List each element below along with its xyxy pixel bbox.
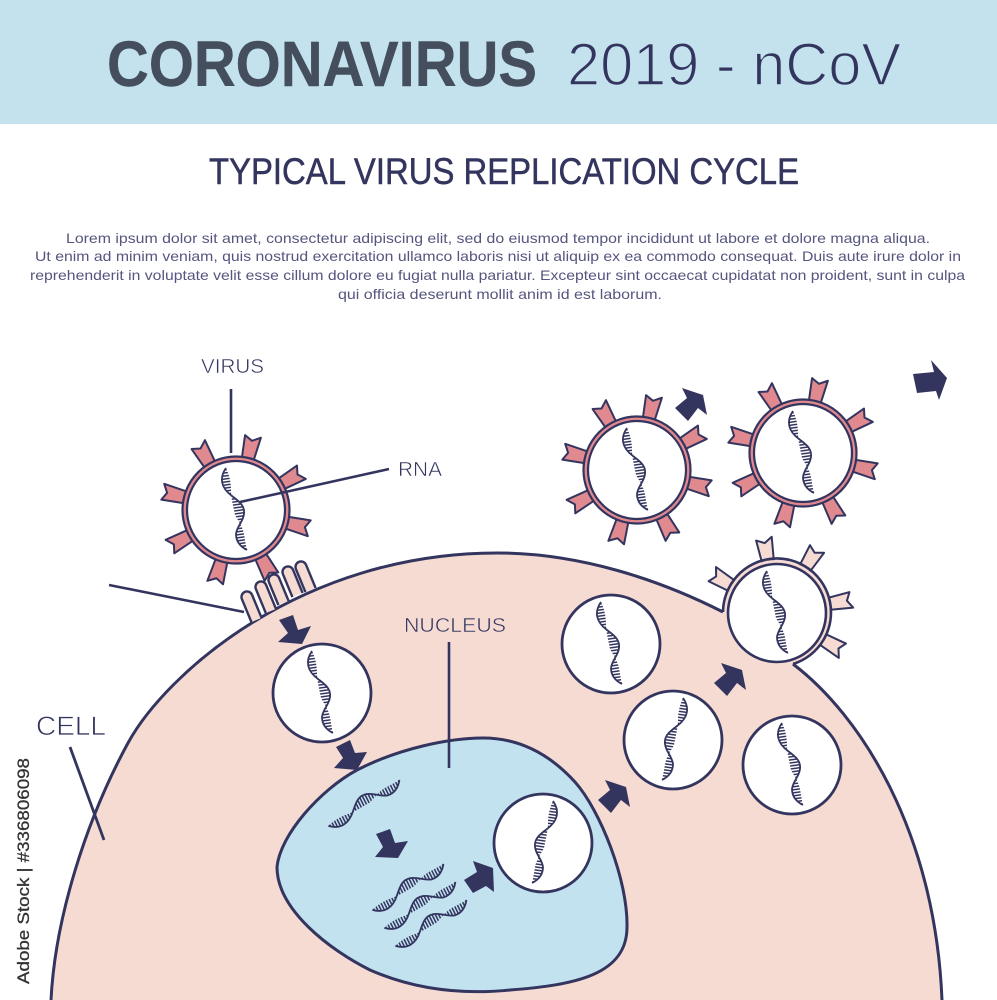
RNA strand in nucleus: [322, 780, 407, 830]
label: VIRUS: [201, 356, 264, 453]
header band: [0, 0, 997, 124]
label: VIRUS: VIRUS: [201, 356, 264, 378]
cell body: [51, 553, 942, 1000]
label: RNA: [240, 459, 443, 502]
vesicle entering cell: [273, 644, 371, 742]
virus attached to the cell: [160, 434, 312, 585]
vesicle right: [743, 716, 841, 814]
label: CELL: [36, 711, 106, 840]
arrow: assembly: [464, 861, 494, 893]
arrow: outward: [913, 360, 947, 400]
label: NUCLEUS: NUCLEUS: [404, 615, 506, 637]
vesicle middle: [624, 691, 722, 789]
body text: Ut enim ad minim veniam, quis nostrud exercitation ullamco laboris nisi ut aliquip ex ea commodo consequat. Duis aute irure dolor in: [35, 248, 961, 264]
subtitle: 2019 - nCoV: 2019 - nCoV: [567, 31, 901, 98]
side caption: Adobe Stock | #336806098: [14, 758, 33, 984]
heading: TYPICAL VIRUS REPLICATION CYCLE: [209, 151, 799, 192]
released virus left: [561, 394, 713, 545]
vesicle in nucleus: [494, 794, 592, 892]
arrow: to nucleus: [334, 740, 367, 770]
arrow: to membrane: [714, 663, 746, 696]
arrow: into cell: [278, 615, 311, 644]
vesicle upper: [562, 595, 660, 693]
cell receptors: [241, 561, 316, 622]
nucleus: [277, 738, 627, 992]
body text: Lorem ipsum dolor sit amet, consectetur adipiscing elit, sed do eiusmod tempor incididunt ut labore et dolore magna aliqua.: [66, 230, 930, 246]
replicated RNA strands: [366, 864, 474, 950]
title: CORONAVIRUS: [107, 28, 537, 100]
body text: [30, 230, 965, 302]
released virus right: [727, 377, 879, 528]
arrow: leaving nucleus: [598, 780, 630, 813]
arrow: release: [675, 388, 707, 421]
budding virus: [708, 537, 853, 666]
arrow: replication: [375, 829, 408, 858]
label: receptor pointer: [109, 585, 244, 612]
label: CELL: CELL: [36, 711, 106, 741]
body text: reprehenderit in voluptate velit esse cillum dolore eu fugiat nulla pariatur. Excepteur sint occaecat cupidatat non proident, sunt in culpa: [30, 267, 965, 283]
label: RNA: RNA: [398, 459, 443, 481]
body text: qui officia deserunt mollit anim id est laborum.: [338, 286, 662, 302]
